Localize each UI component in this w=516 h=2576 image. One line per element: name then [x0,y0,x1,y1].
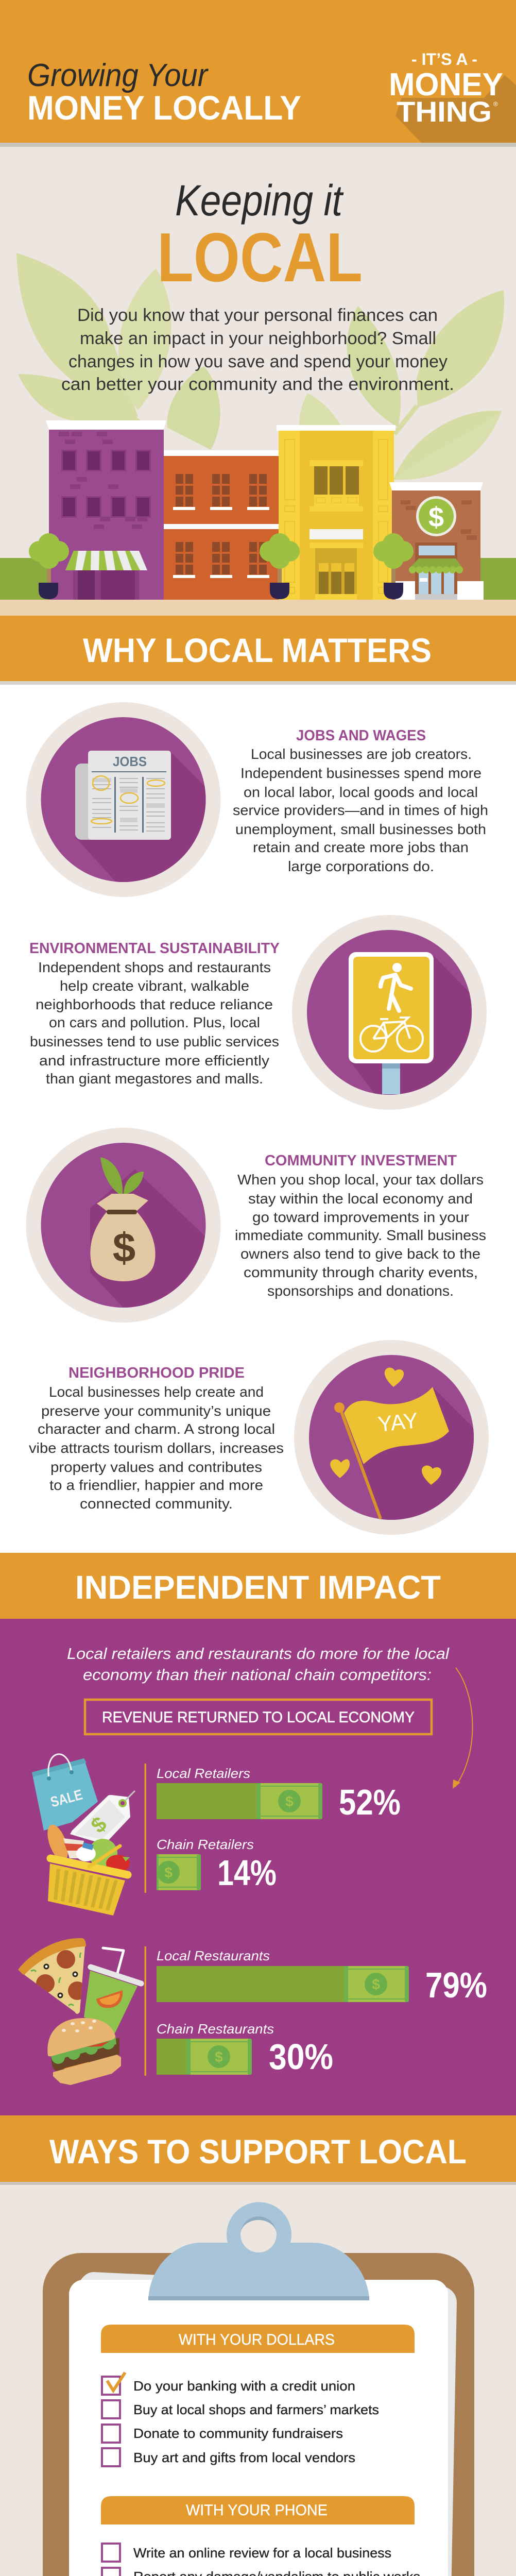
text block: community investment: When you shop local, your tax dollars [237,1172,484,1188]
text block: community investment [235,1153,486,1299]
bar: chain retailers 14%: Chain Retailers [157,1837,254,1852]
text block: neighborhood pride: character and charm. A strong local [38,1421,275,1437]
bar: local restaurants 79%: $ [372,1976,380,1992]
header title: MONEY LOCALLY [27,89,301,127]
clip [148,2202,369,2300]
bar: with your dollars: WITH YOUR DOLLARS [179,2331,335,2348]
bar: local retailers 52%: Local Retailers [157,1766,250,1781]
text block: neighborhood pride: Local businesses help create and [49,1384,264,1400]
text block: environmental sustainability: neighborhoods that reduce reliance [36,996,273,1012]
panel: beige background for checklist [0,2185,516,2576]
text block: neighborhood pride: to a friendlier, happier and more [49,1477,263,1493]
text block: environmental sustainability: businesses tend to use public services [30,1033,279,1049]
bar: chain restaurants 30%: $ [215,2049,223,2065]
checklist items: Write an online review for a local business [133,2545,391,2561]
text block: neighborhood pride: property values and contributes [50,1459,262,1475]
section heading: why local matters: WHY LOCAL MATTERS [83,631,432,669]
hero intro text: changes in how you save and spend your money [68,352,448,371]
text block: environmental sustainability: ENVIRONMENTAL SUSTAINABILITY [29,940,280,957]
checkboxes [102,2377,120,2466]
bar: with your phone: WITH YOUR PHONE [186,2502,328,2519]
logo: It's a Money Thing: - IT’S A - [411,50,477,69]
text block: environmental sustainability [29,940,280,1087]
hero intro text: make an impact in your neighborhood? Small [80,329,436,348]
divider: retailers [144,1764,146,1893]
bar: with your dollars [101,2325,415,2353]
section heading: ways to support local: WAYS TO SUPPORT LOCAL [49,2132,467,2171]
background leaves [16,253,504,480]
text block: environmental sustainability: on cars and pollution. Plus, local [49,1014,260,1030]
section heading: ways to support local [0,2115,516,2185]
building: purple shop [46,420,166,600]
tree left [29,533,69,599]
text block: jobs and wages: Local businesses are job creators. [251,746,472,762]
checklist group: with your phone [101,2496,423,2576]
arrow: curved down to chart [453,1668,473,1789]
building: credit union bank [389,482,484,600]
bar: local retailers 52% [157,1766,401,1822]
icon: yay flag with hearts: YAY [376,1408,419,1436]
text block: jobs and wages: unemployment, small businesses both [235,821,486,837]
header title [27,58,301,127]
text block: environmental sustainability: Independent shops and restaurants [38,959,271,975]
checklist items: Buy at local shops and farmers’ markets [133,2402,379,2417]
text block: environmental sustainability: than giant megastores and malls. [46,1071,263,1087]
back sheet [55,2272,457,2576]
bar: local retailers 52%: $ [285,1793,294,1809]
panel: why local matters [26,702,489,1535]
text block: community investment: immediate community. Small business [235,1227,486,1243]
text block: community investment: sponsorships and donations. [267,1283,454,1299]
tan sidewalk band [0,600,516,616]
checklist group: with your dollars [101,2325,415,2466]
paper sheet [69,2280,448,2576]
logo: It's a Money Thing: ® [493,100,498,108]
icon: pizza, drink and burger [18,1938,141,2085]
panel: independent impact [0,1619,516,2115]
logo: It's a Money Thing: MONEY [389,67,503,103]
icon: shopping bag, tag and basket: $ [86,1811,111,1838]
checkboxes [102,2544,120,2576]
building: orange apartments [164,450,282,600]
text block: neighborhood pride [29,1365,284,1512]
clipboard [43,2202,474,2576]
tree right [373,533,414,599]
tree middle [260,533,300,599]
text block: community investment: community through charity events, [244,1264,478,1280]
section heading: why local matters [0,616,516,685]
text block: neighborhood pride: vibe attracts tourism dollars, increases [29,1440,284,1456]
text block: community investment: COMMUNITY INVESTMENT [265,1153,457,1169]
hero intro text [61,306,454,394]
check mark [107,2372,125,2391]
bar: local restaurants 79% [157,1948,487,2005]
bar: chain retailers 14%: $ [164,1865,173,1880]
building: yellow tower [277,425,395,600]
icon: money bag with sprout [26,1128,220,1323]
icon: dollar sign badge: $ [428,502,444,533]
header title: Growing Your [27,58,209,93]
bar: chain restaurants 30%: Chain Restaurants [157,2021,274,2037]
text block: neighborhood pride: connected community. [80,1496,233,1512]
divider: restaurants [144,1946,146,2076]
checklist items: Buy art and gifts from local vendors [133,2450,355,2465]
hero title [157,176,363,296]
text block: jobs and wages: on local labor, local goods and local [244,784,478,800]
text block: community investment: go toward improvements in your [252,1209,469,1225]
logo: It's a Money Thing: THING [397,95,492,128]
text block: jobs and wages: JOBS AND WAGES [296,727,426,744]
checklist items: Donate to community fundraisers [133,2426,343,2441]
bar: chain restaurants 30%: 30% [269,2037,333,2077]
logo: It's a Money Thing [389,50,516,143]
hero intro text: can better your community and the environment. [61,375,454,394]
bar: local retailers 52%: 52% [339,1782,401,1822]
text block: jobs and wages: service providers—and in times of high [233,802,488,818]
ground [0,558,516,600]
text block: jobs and wages: Independent businesses spend more [240,765,481,781]
bar: local restaurants 79%: Local Restaurants [157,1948,270,1963]
checklist items [133,2545,423,2576]
bar: chain retailers 14% [157,1837,277,1893]
text block: community investment: stay within the local economy and [248,1191,473,1207]
section heading: independent impact [0,1553,516,1619]
icon: jobs newspaper: JOBS [113,754,147,769]
bar: with your phone [101,2496,415,2524]
icon: shopping bag, tag and basket [32,1754,135,1916]
intro italic text: Local retailers and restaurants do more for the local [67,1645,450,1663]
text block: environmental sustainability: and infrastructure more efficiently [39,1053,269,1069]
text block: jobs and wages: retain and create more jobs than [253,839,469,855]
text block: jobs and wages: large corporations do. [288,858,434,874]
bar: chain restaurants 30% [157,2021,333,2077]
bar: local restaurants 79%: 79% [425,1965,487,2005]
text block: jobs and wages [233,727,488,874]
bar: chain retailers 14%: 14% [217,1853,277,1893]
checklist items: Do your banking with a credit union [133,2378,355,2394]
icon: jobs newspaper [26,702,220,902]
hero intro text: Did you know that your personal finances can [77,306,438,325]
icon: pedestrian and bike sign [292,915,487,1110]
header band [0,0,516,147]
text block: community investment: owners also tend to give back to the [240,1246,480,1262]
intro italic text: economy than their national chain competitors: [83,1666,432,1684]
icon: yay flag with hearts [294,1340,489,1535]
checklist items [133,2378,379,2465]
text block: neighborhood pride: NEIGHBORHOOD PRIDE [68,1365,245,1381]
intro italic text [67,1645,450,1684]
hero title: Keeping it [175,176,344,225]
callout: revenue returned: REVENUE RETURNED TO LOCAL ECONOMY [102,1709,415,1726]
icon: money bag with sprout: $ [113,1225,135,1270]
hero panel: keeping it local [0,147,516,600]
icon: dollar sign badge [416,496,456,536]
callout: revenue returned [85,1700,432,1734]
hero title: LOCAL [157,218,363,296]
text block: neighborhood pride: preserve your community’s unique [41,1403,271,1419]
section heading: independent impact: INDEPENDENT IMPACT [75,1569,441,1606]
icon: shopping bag, tag and basket: SALE [49,1786,84,1810]
text block: environmental sustainability: help create vibrant, walkable [60,978,249,994]
